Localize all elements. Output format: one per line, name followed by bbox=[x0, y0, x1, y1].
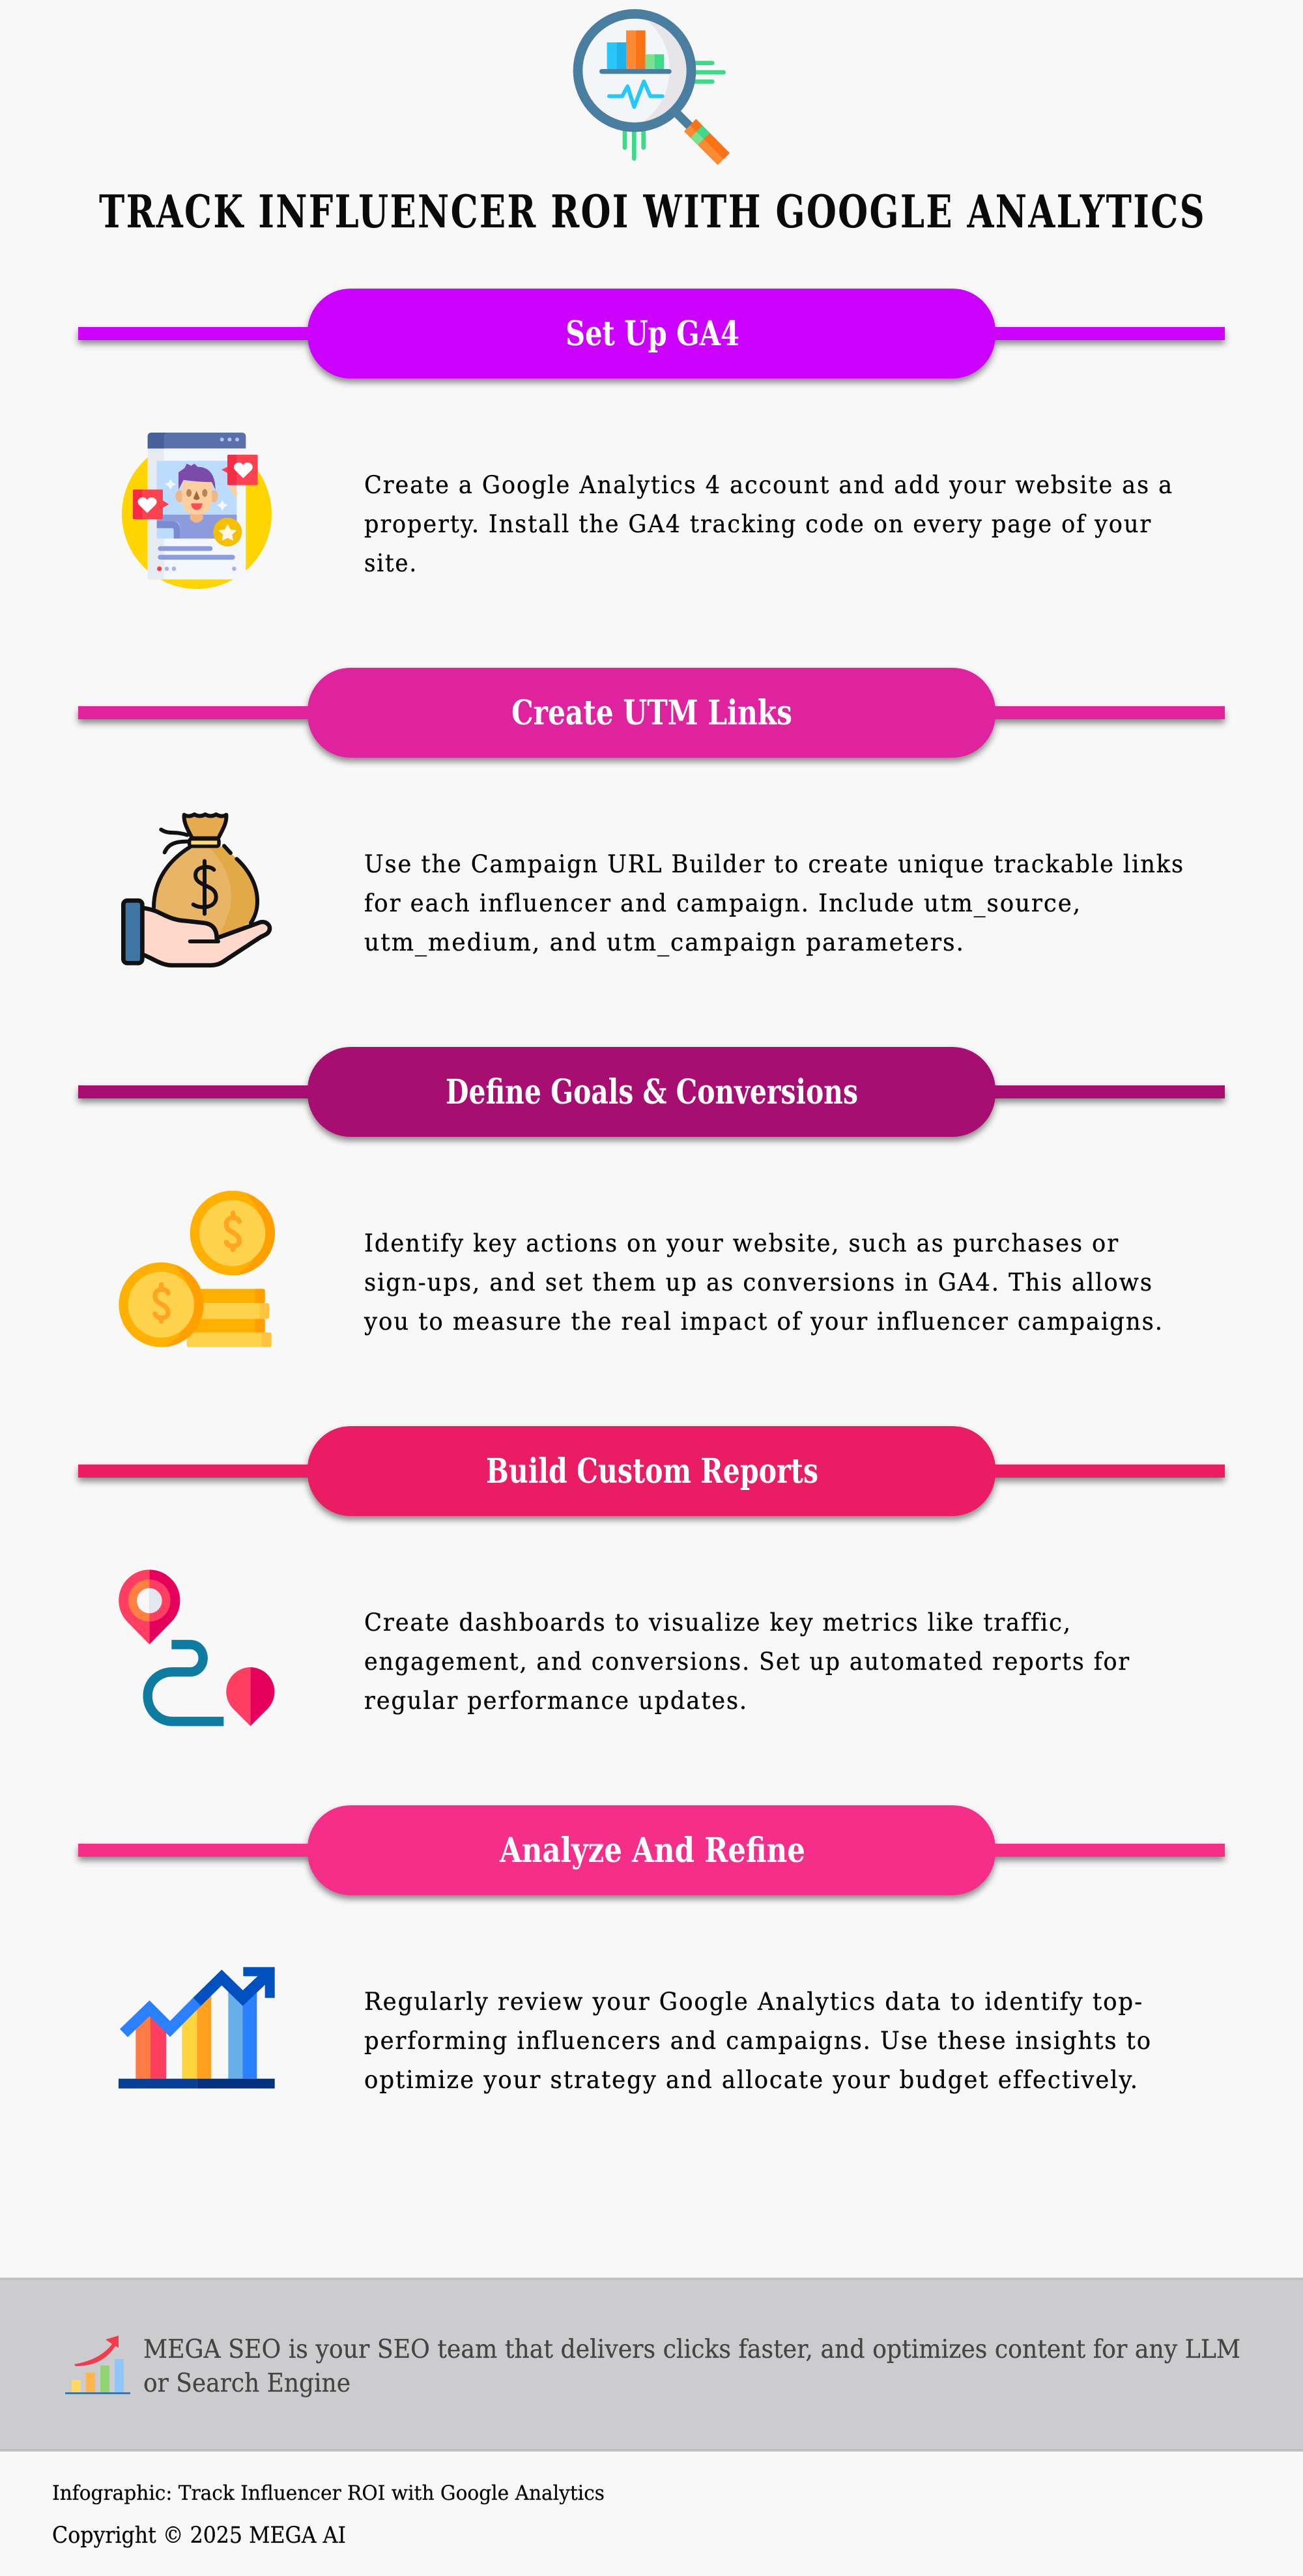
text: Define Goals & Conversions body: you to measure the real impact of your influencer campaigns. bbox=[364, 1308, 1164, 1336]
icon: rising bar chart bbox=[119, 1967, 275, 2089]
icon: gold coins bbox=[119, 1191, 275, 1347]
icon: route with map pins bbox=[119, 1569, 274, 1726]
text: Set Up GA4 body: site. bbox=[364, 549, 418, 577]
text: Build Custom Reports body: regular performance updates. bbox=[364, 1687, 748, 1715]
text: Analyze And Refine body: performing influencers and campaigns. Use these insights to bbox=[364, 2027, 1152, 2055]
text: Analyze And Refine body bbox=[364, 1988, 1152, 2094]
text: Create UTM Links body bbox=[364, 850, 1184, 957]
text: Build Custom Reports body: engagement, and conversions. Set up automated reports for bbox=[364, 1648, 1130, 1676]
text: Define Goals & Conversions body: Identify key actions on your website, such as purchases or bbox=[364, 1229, 1119, 1257]
icon: hand holding money bag bbox=[123, 814, 270, 966]
icon: influencer profile bbox=[122, 433, 272, 589]
banner: Build Custom Reports bbox=[78, 1426, 1225, 1516]
heading: Set Up GA4: Set Up GA4 bbox=[566, 314, 739, 354]
text: Build Custom Reports body bbox=[364, 1609, 1130, 1715]
text: Set Up GA4 body: property. Install the GA4 tracking code on every page of your bbox=[364, 510, 1152, 538]
text: Analyze And Refine body: optimize your strategy and allocate your budget effectively. bbox=[364, 2066, 1139, 2094]
footer text: Infographic: Track Influencer ROI with Google Analytics bbox=[52, 2482, 605, 2505]
footer text bbox=[52, 2482, 605, 2549]
text: Create UTM Links body: Use the Campaign URL Builder to create unique trackable links bbox=[364, 850, 1184, 878]
text: Create UTM Links body: for each influencer and campaign. Include utm_source, bbox=[364, 889, 1081, 918]
section: Analyze And Refine bbox=[78, 1805, 1225, 2094]
text: Set Up GA4 body: Create a Google Analytics 4 account and add your website as a bbox=[364, 471, 1173, 499]
footer text: Copyright © 2025 MEGA AI bbox=[52, 2523, 346, 2549]
banner: Analyze And Refine bbox=[78, 1805, 1225, 1895]
text: promo: or Search Engine bbox=[143, 2369, 351, 2398]
text: Set Up GA4 body bbox=[364, 471, 1173, 577]
icon: growth chart bbox=[65, 2336, 130, 2394]
text: promo bbox=[143, 2335, 1240, 2398]
text: promo: MEGA SEO is your SEO team that delivers clicks faster, and optimizes content for any LLM bbox=[143, 2335, 1240, 2364]
heading: Define Goals & Conversions: Define Goals & Conversions bbox=[446, 1072, 858, 1112]
icon: magnifying glass with charts bbox=[578, 14, 730, 165]
banner: Create UTM Links bbox=[78, 668, 1225, 758]
section: Define Goals & Conversions bbox=[78, 1047, 1225, 1347]
section: Build Custom Reports bbox=[78, 1426, 1225, 1726]
section: Set Up GA4 bbox=[78, 289, 1225, 589]
text: Build Custom Reports body: Create dashboards to visualize key metrics like traffic, bbox=[364, 1609, 1072, 1637]
heading: Create UTM Links: Create UTM Links bbox=[511, 693, 792, 733]
text: Analyze And Refine body: Regularly review your Google Analytics data to identify top- bbox=[364, 1988, 1143, 2016]
banner: Set Up GA4 bbox=[78, 289, 1225, 379]
text: Define Goals & Conversions body: sign-ups, and set them up as conversions in GA4. This allows bbox=[364, 1268, 1153, 1296]
section: Create UTM Links bbox=[78, 668, 1225, 966]
heading: Analyze And Refine: Analyze And Refine bbox=[499, 1831, 805, 1870]
panel: MEGA SEO promo band bbox=[0, 2278, 1303, 2452]
text: Create UTM Links body: utm_medium, and utm_campaign parameters. bbox=[364, 928, 965, 957]
text: Define Goals & Conversions body bbox=[364, 1229, 1164, 1336]
heading: Build Custom Reports: Build Custom Reports bbox=[486, 1452, 818, 1491]
banner: Define Goals & Conversions bbox=[78, 1047, 1225, 1137]
